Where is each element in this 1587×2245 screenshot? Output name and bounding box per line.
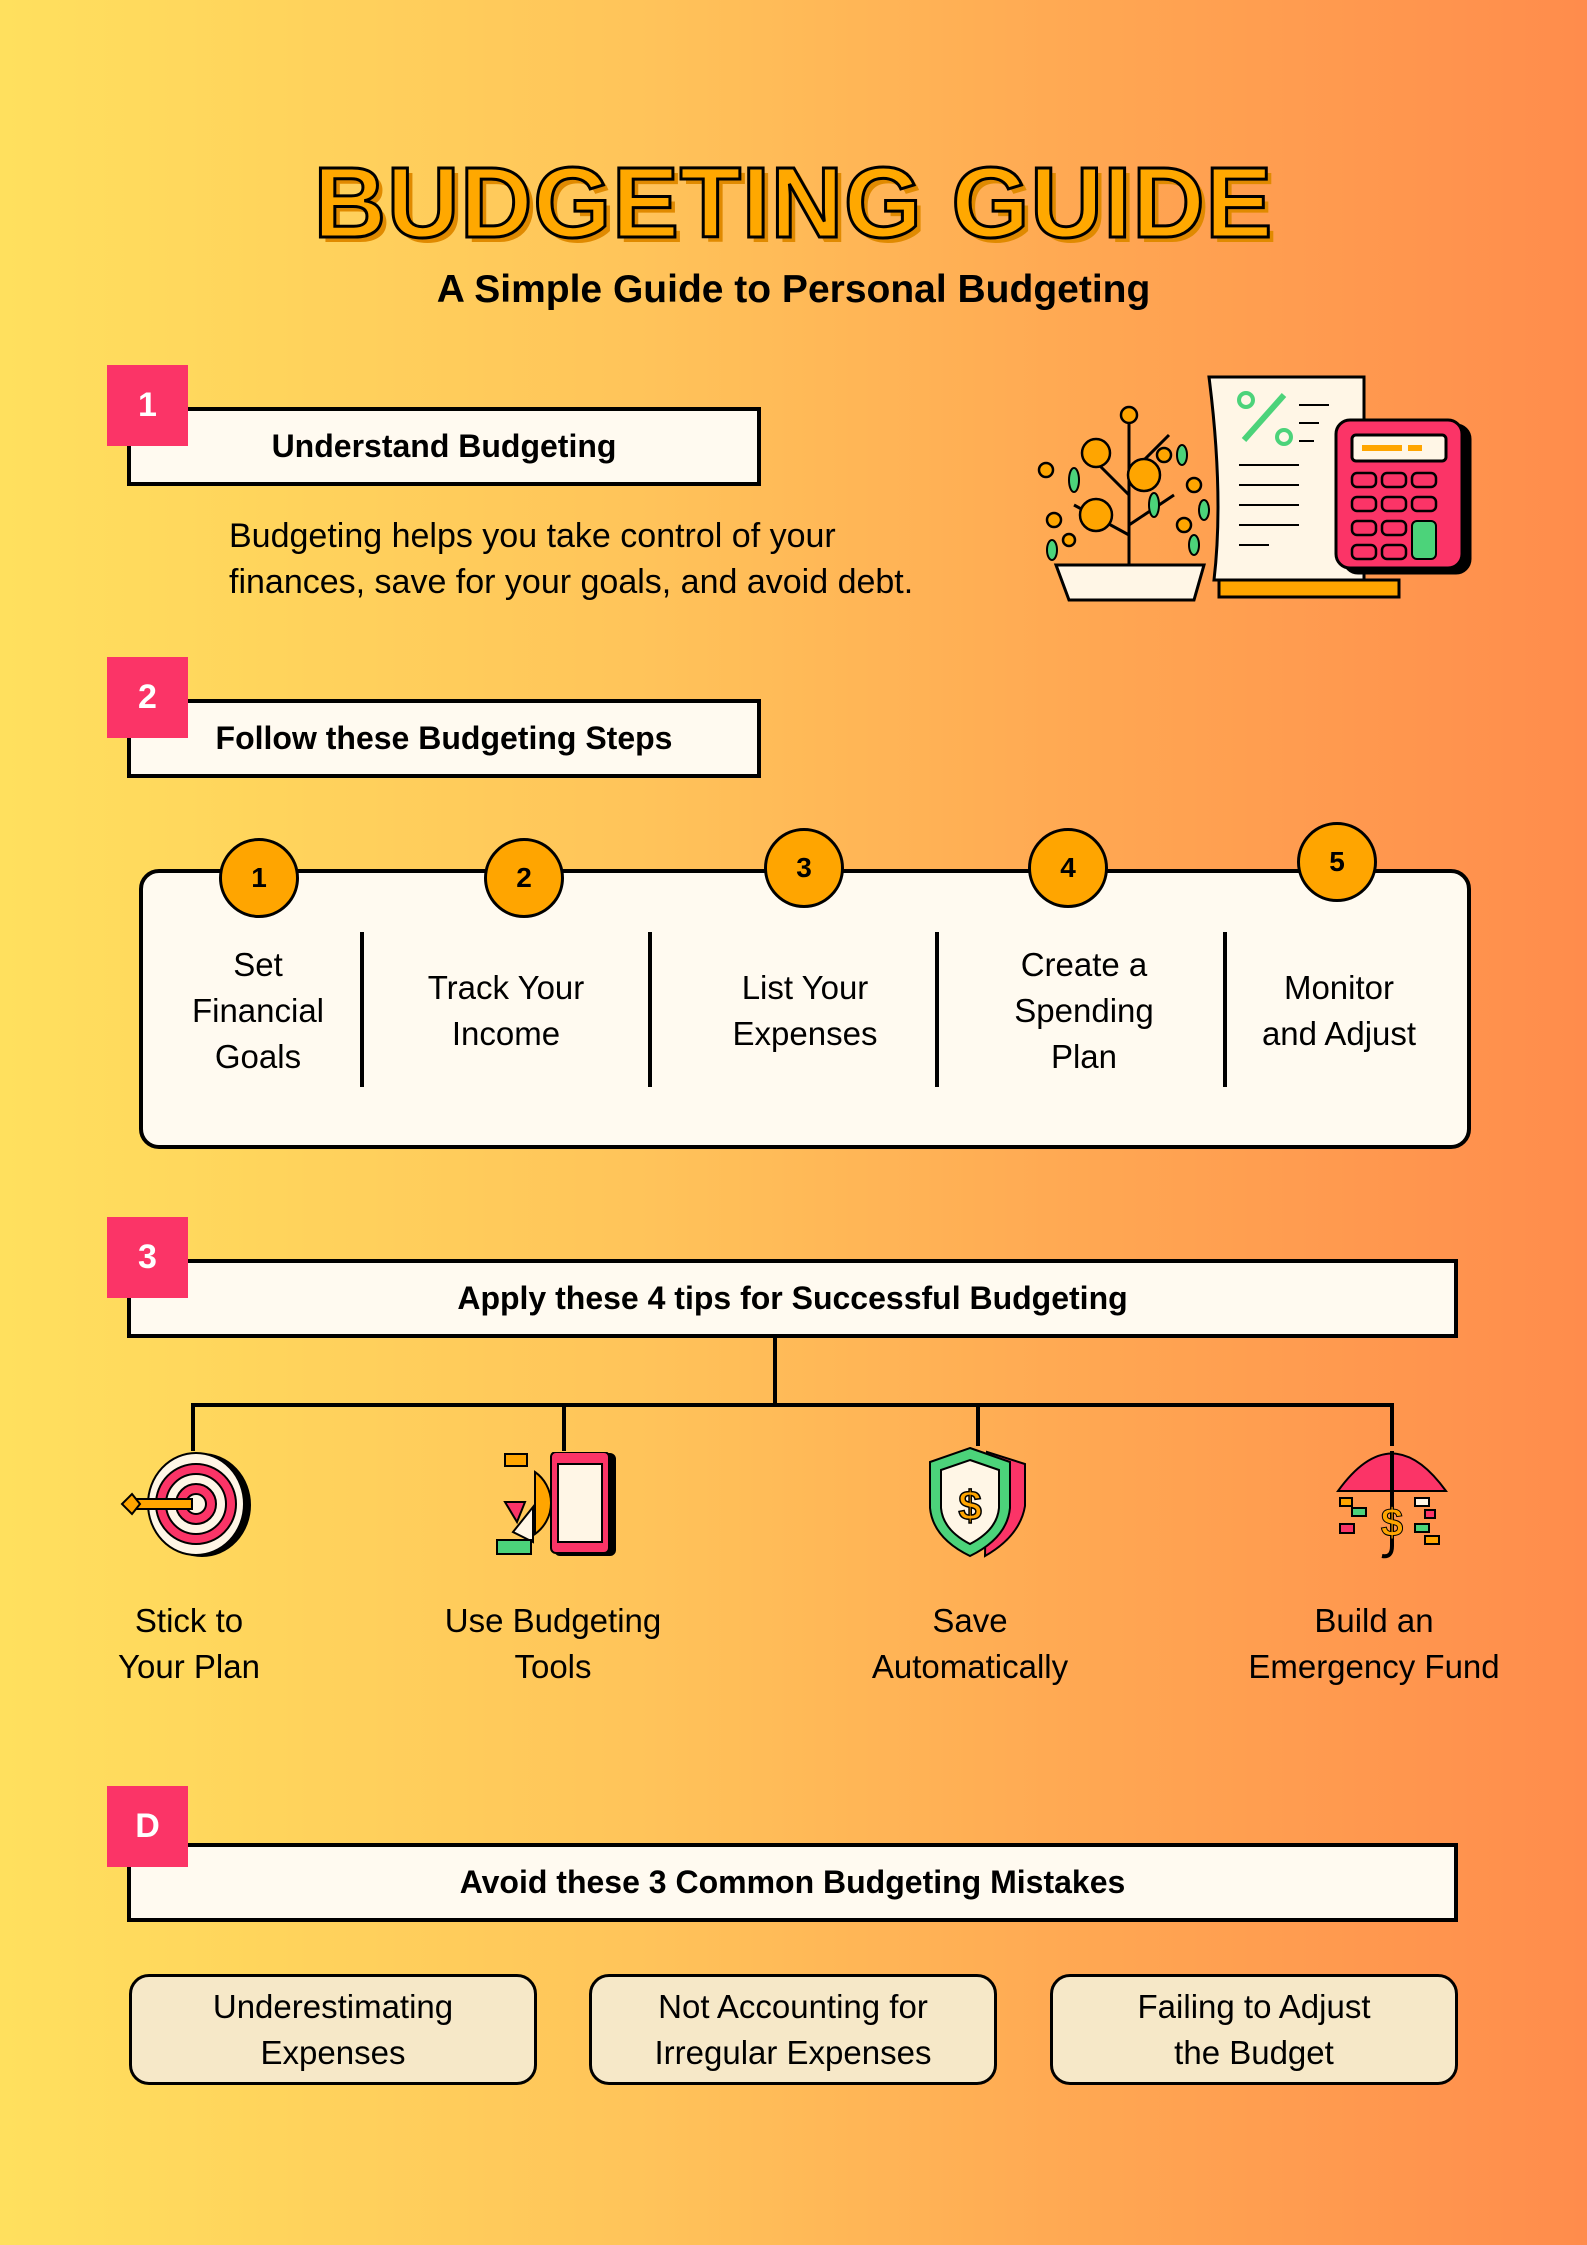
icon: umbrella [1336,1451,1448,1558]
section 3 heading [127,1259,1458,1338]
tip 4 text [1248,1602,1500,1685]
section D heading [127,1843,1458,1922]
step 4: Spending [1014,992,1154,1029]
tree connector [191,1338,1394,1451]
tip 2 text: Use Budgeting [445,1602,661,1639]
mistake 3 [1050,1974,1458,2085]
step 3: Expenses [733,1015,877,1052]
step 1 [192,838,324,1075]
section 1 heading [127,407,761,486]
section 2 heading [127,699,761,778]
icon: umbrella: $ [1381,1501,1403,1545]
step 1: Set [233,946,283,983]
icon: shield [929,1447,1026,1558]
step 5 [1262,822,1416,1052]
mistake 3: the Budget [1174,2034,1334,2070]
section 1 badge [107,365,188,446]
step 3: 3 [796,852,812,883]
step 5: and Adjust [1262,1015,1416,1052]
mistake 2 [589,1974,997,2085]
step 4: Plan [1051,1038,1117,1075]
icon: budgeting tools phone [496,1452,616,1556]
step 4: 4 [1060,852,1076,883]
mistake 1: Expenses [261,2034,405,2070]
section 3 badge [107,1217,188,1298]
step 1: Goals [215,1038,301,1075]
section 2 badge [107,657,188,738]
section 2 badge: 2 [138,678,157,716]
step 1: Financial [192,992,324,1029]
icon: shield: $ [958,1482,982,1529]
mistake 1 [129,1974,537,2085]
section 3 badge: 3 [138,1238,157,1276]
subtitle: A Simple Guide to Personal Budgeting [437,268,1150,311]
tip 3 text [872,1602,1068,1685]
tip 2 text [445,1602,661,1685]
tip 4 text: Emergency Fund [1248,1648,1500,1685]
step 1: 1 [251,862,267,893]
step 5: 5 [1329,846,1345,877]
step 2: 2 [516,862,532,893]
section D badge: D [135,1807,160,1845]
tip 3 text: Automatically [872,1648,1068,1685]
tip 3 text: Save [932,1602,1008,1639]
step 4: Create a [1021,946,1147,983]
section 1 badge: 1 [138,386,157,424]
step 3 [733,828,877,1052]
icon: target [120,1452,251,1557]
mistake 3: Failing to Adjust [1138,1988,1370,2024]
step 5: Monitor [1284,969,1394,1006]
section D heading: Avoid these 3 Common Budgeting Mistakes [460,1864,1125,1900]
step 4 [1014,828,1154,1075]
mistake 2: Irregular Expenses [654,2034,931,2070]
step 2: Income [452,1015,560,1052]
tip 2 text: Tools [514,1648,592,1685]
tip 4 text: Build an [1314,1602,1434,1639]
tip 1 text [118,1602,260,1685]
section 1 text: Budgeting helps you take control of your [229,517,836,555]
illustration: money plant, receipt, calculator [1038,376,1472,602]
title: BUDGETING GUIDE [314,147,1273,259]
tip 1 text: Your Plan [118,1648,260,1685]
section 3 heading: Apply these 4 tips for Successful Budgeting [457,1280,1128,1316]
steps panel [139,869,1471,1149]
step 2: Track Your [428,969,584,1006]
step 2 [428,838,584,1052]
section 1 text [229,517,913,601]
mistake 1: Underestimating [213,1988,453,2024]
section 1 heading: Understand Budgeting [272,428,616,464]
section 2 heading: Follow these Budgeting Steps [216,720,672,756]
mistake 2: Not Accounting for [658,1988,928,2024]
section 1 text: finances, save for your goals, and avoid debt. [229,563,913,601]
tip 1 text: Stick to [135,1602,243,1639]
section D badge [107,1786,188,1867]
step 3: List Your [742,969,868,1006]
